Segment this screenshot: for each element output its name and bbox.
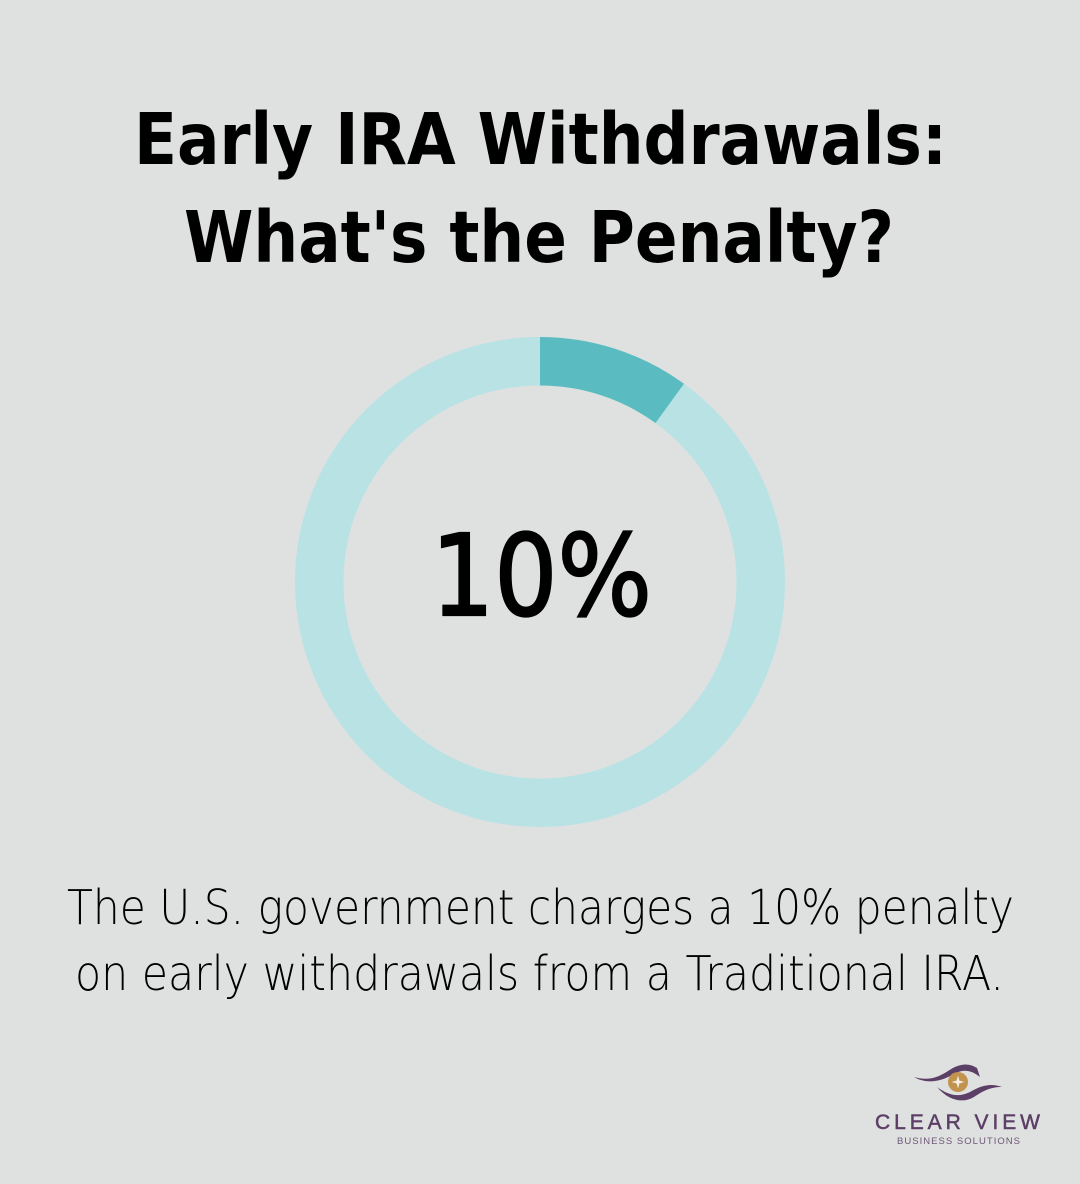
description text (67, 880, 1014, 1002)
donut value: 10% (431, 512, 652, 642)
title (134, 98, 947, 279)
logo eye icon (914, 1064, 1002, 1100)
title: What's the Penalty? (184, 196, 894, 279)
donut highlighted segment (540, 337, 684, 423)
logo: Clear View Business Solutions (875, 1064, 1040, 1147)
title: Early IRA Withdrawals: (134, 98, 947, 181)
donut chart: 10% (319, 337, 761, 803)
logo tagline: BUSINESS SOLUTIONS (897, 1136, 1020, 1147)
donut track (319, 361, 761, 803)
logo wordmark: CLEAR VIEW (875, 1111, 1040, 1134)
